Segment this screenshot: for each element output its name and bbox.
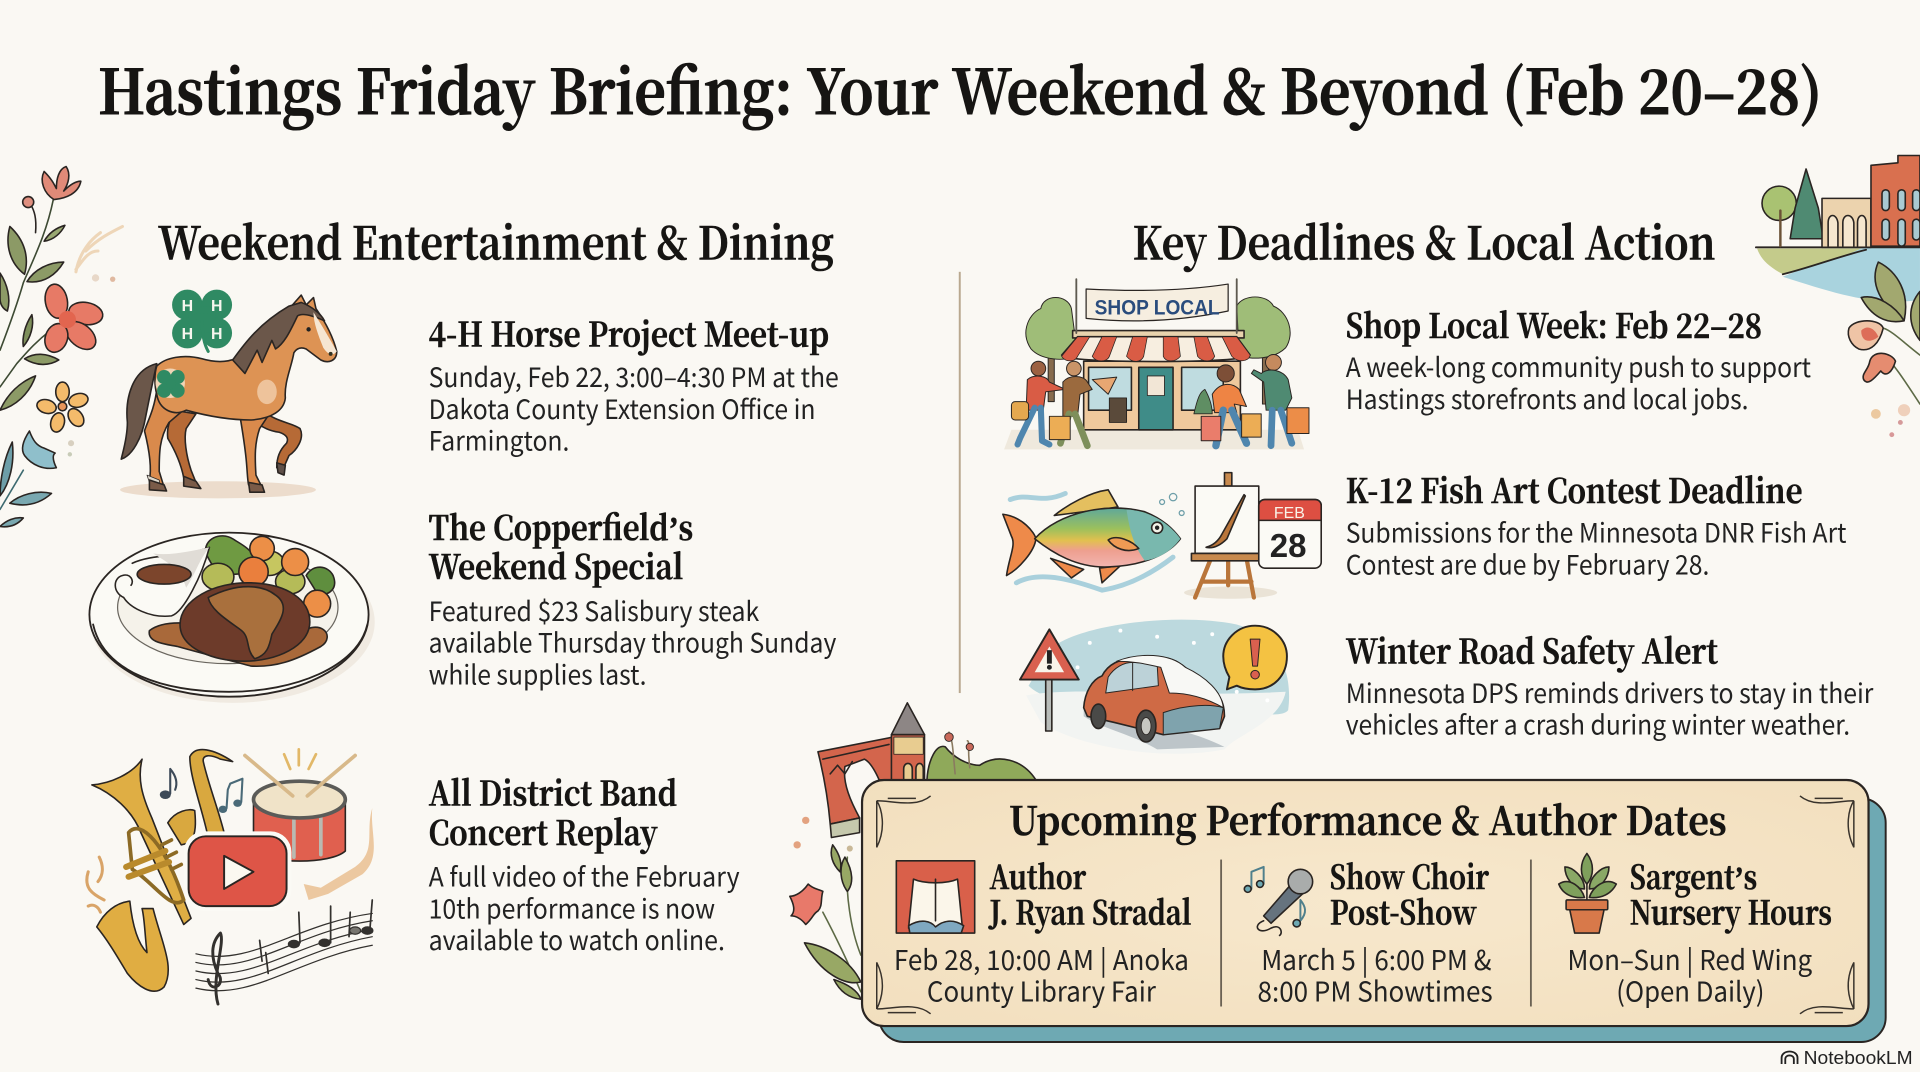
panel: upcoming dates [862,780,1886,1042]
clover: 4-H logo: H [182,326,193,343]
column: show choir: 8:00 PM Showtimes [1258,970,1493,1010]
item: 4-H horse project [429,308,839,459]
blue sprigs [0,442,13,496]
gravy puddle [149,623,327,666]
banner [1076,279,1237,333]
item: Copperfield's special: available Thursday through Sunday [429,622,836,661]
shopper 1 [1011,361,1065,444]
item: Copperfield's special: Weekend Special [429,540,683,589]
icon: microphone [1244,867,1313,935]
snare drum [253,800,345,861]
car [1084,659,1224,735]
illustration: shop local storefront [1004,279,1309,449]
item: fish art contest [1346,464,1846,582]
illustration: Salisbury steak plate [89,533,375,703]
item: shop local week: A week-long community push to support [1346,346,1811,385]
shopper 2 [1049,361,1092,446]
red flower [41,282,105,356]
clover: 4-H logo: H [182,298,193,315]
item: fish art contest: Contest are due by February 28. [1346,543,1709,582]
item: band concert replay: available to watch online. [429,919,725,958]
watermark: NotebookLM: NotebookLM [1804,1047,1913,1068]
item: 4-H horse project: Farmington. [429,420,569,459]
illustration: band instruments and play button [87,749,374,1004]
item: fish art contest: Submissions for the Minnesota DNR Fish Art [1346,511,1846,550]
column: Sargent's: (Open Daily) [1616,970,1764,1010]
item: 4-H horse project: 4-H Horse Project Meet-up [429,308,829,357]
windows [1089,367,1131,410]
illustration: horse with 4-H clover [120,290,337,498]
item: band concert replay: 10th performance is now [429,887,715,926]
tail [121,364,157,459]
item: shop local week: Shop Local Week: Feb 22–28 [1346,299,1762,348]
item: fish art contest: K-12 Fish Art Contest Deadline [1346,464,1802,513]
alert bubble [1223,626,1287,689]
music note [170,769,176,793]
illustration: fish, easel and calendar [1003,473,1321,599]
heading: weekend entertainment: Weekend Entertainment & Dining [158,208,834,273]
clover: flank mark [156,369,185,398]
item: Copperfield's special: while supplies last. [429,653,647,692]
trees [1026,297,1290,404]
item: band concert replay: Concert Replay [429,806,658,855]
near front leg [240,414,269,487]
vegetables [202,536,335,617]
gravy boat [115,547,209,616]
decoration: theater and bridge above panel [790,703,1036,999]
item: Copperfield's special [429,501,836,692]
near rear leg [145,389,186,487]
staff with notes [196,900,373,1004]
illustration: fish, easel and calendar: FEB [1274,505,1305,522]
illustration: winter road scene [1020,620,1289,754]
column: Sargent's: Sargent’s [1630,852,1757,899]
item: Copperfield's special: Featured $23 Salisbury steak [429,590,759,629]
item: Copperfield's special: The Copperfield’s [429,501,693,550]
item: winter road safety: Minnesota DPS reminds drivers to stay in their [1346,672,1874,711]
column: Sargent's: Mon–Sun | Red Wing [1567,938,1813,978]
item: band concert replay: All District Band [429,767,677,816]
panel card [862,780,1869,1026]
corner flourishes [877,796,1854,1014]
steak [180,583,310,661]
play button [184,831,291,911]
item: winter road safety: Winter Road Safety Alert [1346,625,1719,674]
item: 4-H horse project: Sunday, Feb 22, 3:00–4:30 PM at the [429,356,839,395]
panel heading: Upcoming Performance & Author Dates [1009,791,1727,847]
trumpet [92,759,191,924]
column: show choir: Show Choir [1330,852,1489,899]
mane [233,302,325,373]
heading: key deadlines: Key Deadlines & Local Action [1133,208,1715,273]
column: author: Feb 28, 10:00 AM | Anoka [894,938,1189,978]
item: shop local week: Hastings storefronts and local jobs. [1346,378,1749,417]
icon: curtain and book [896,861,975,933]
column: author: County Library Fair [927,970,1156,1010]
shopper 3 [1201,365,1261,446]
item: winter road safety [1346,625,1874,743]
illustration: town and river [1756,156,1920,302]
panel shadow [879,798,1886,1042]
column: Sargent's [1559,852,1832,1010]
column: show choir: Post-Show [1330,887,1477,934]
raised front leg [252,410,301,468]
illustration: shop local storefront: SHOP LOCAL [1095,296,1220,320]
orange flower [35,382,90,434]
item: band concert replay [429,767,740,958]
item: 4-H horse project: Dakota County Extension Office in [429,388,816,427]
column: author [894,852,1191,1010]
column: Sargent's: Nursery Hours [1630,887,1832,934]
right floral decoration [1848,262,1920,437]
item: shop local week [1346,299,1811,417]
back saxophone [190,750,233,838]
column: show choir: March 5 | 6:00 PM & [1261,938,1492,978]
item: winter road safety: vehicles after a crash during winter weather. [1346,704,1850,743]
beamed note [227,779,242,808]
clover: 4-H logo: H [211,326,223,343]
shopper 4 [1251,354,1309,446]
far rear leg [167,410,196,482]
item: band concert replay: A full video of the February [429,855,740,894]
column: show choir [1244,852,1493,1010]
left floral decoration [0,167,122,527]
column: author: Author [989,852,1086,899]
awning [1062,337,1250,362]
icon: potted plant [1559,853,1616,933]
tulip [42,167,81,200]
illustration: fish, easel and calendar: 28 [1270,528,1307,565]
column: author: J. Ryan Stradal [988,887,1191,934]
low saxophone [97,901,168,991]
clover: 4-H logo: H [211,298,223,315]
clover: 4-H logo [172,290,232,351]
